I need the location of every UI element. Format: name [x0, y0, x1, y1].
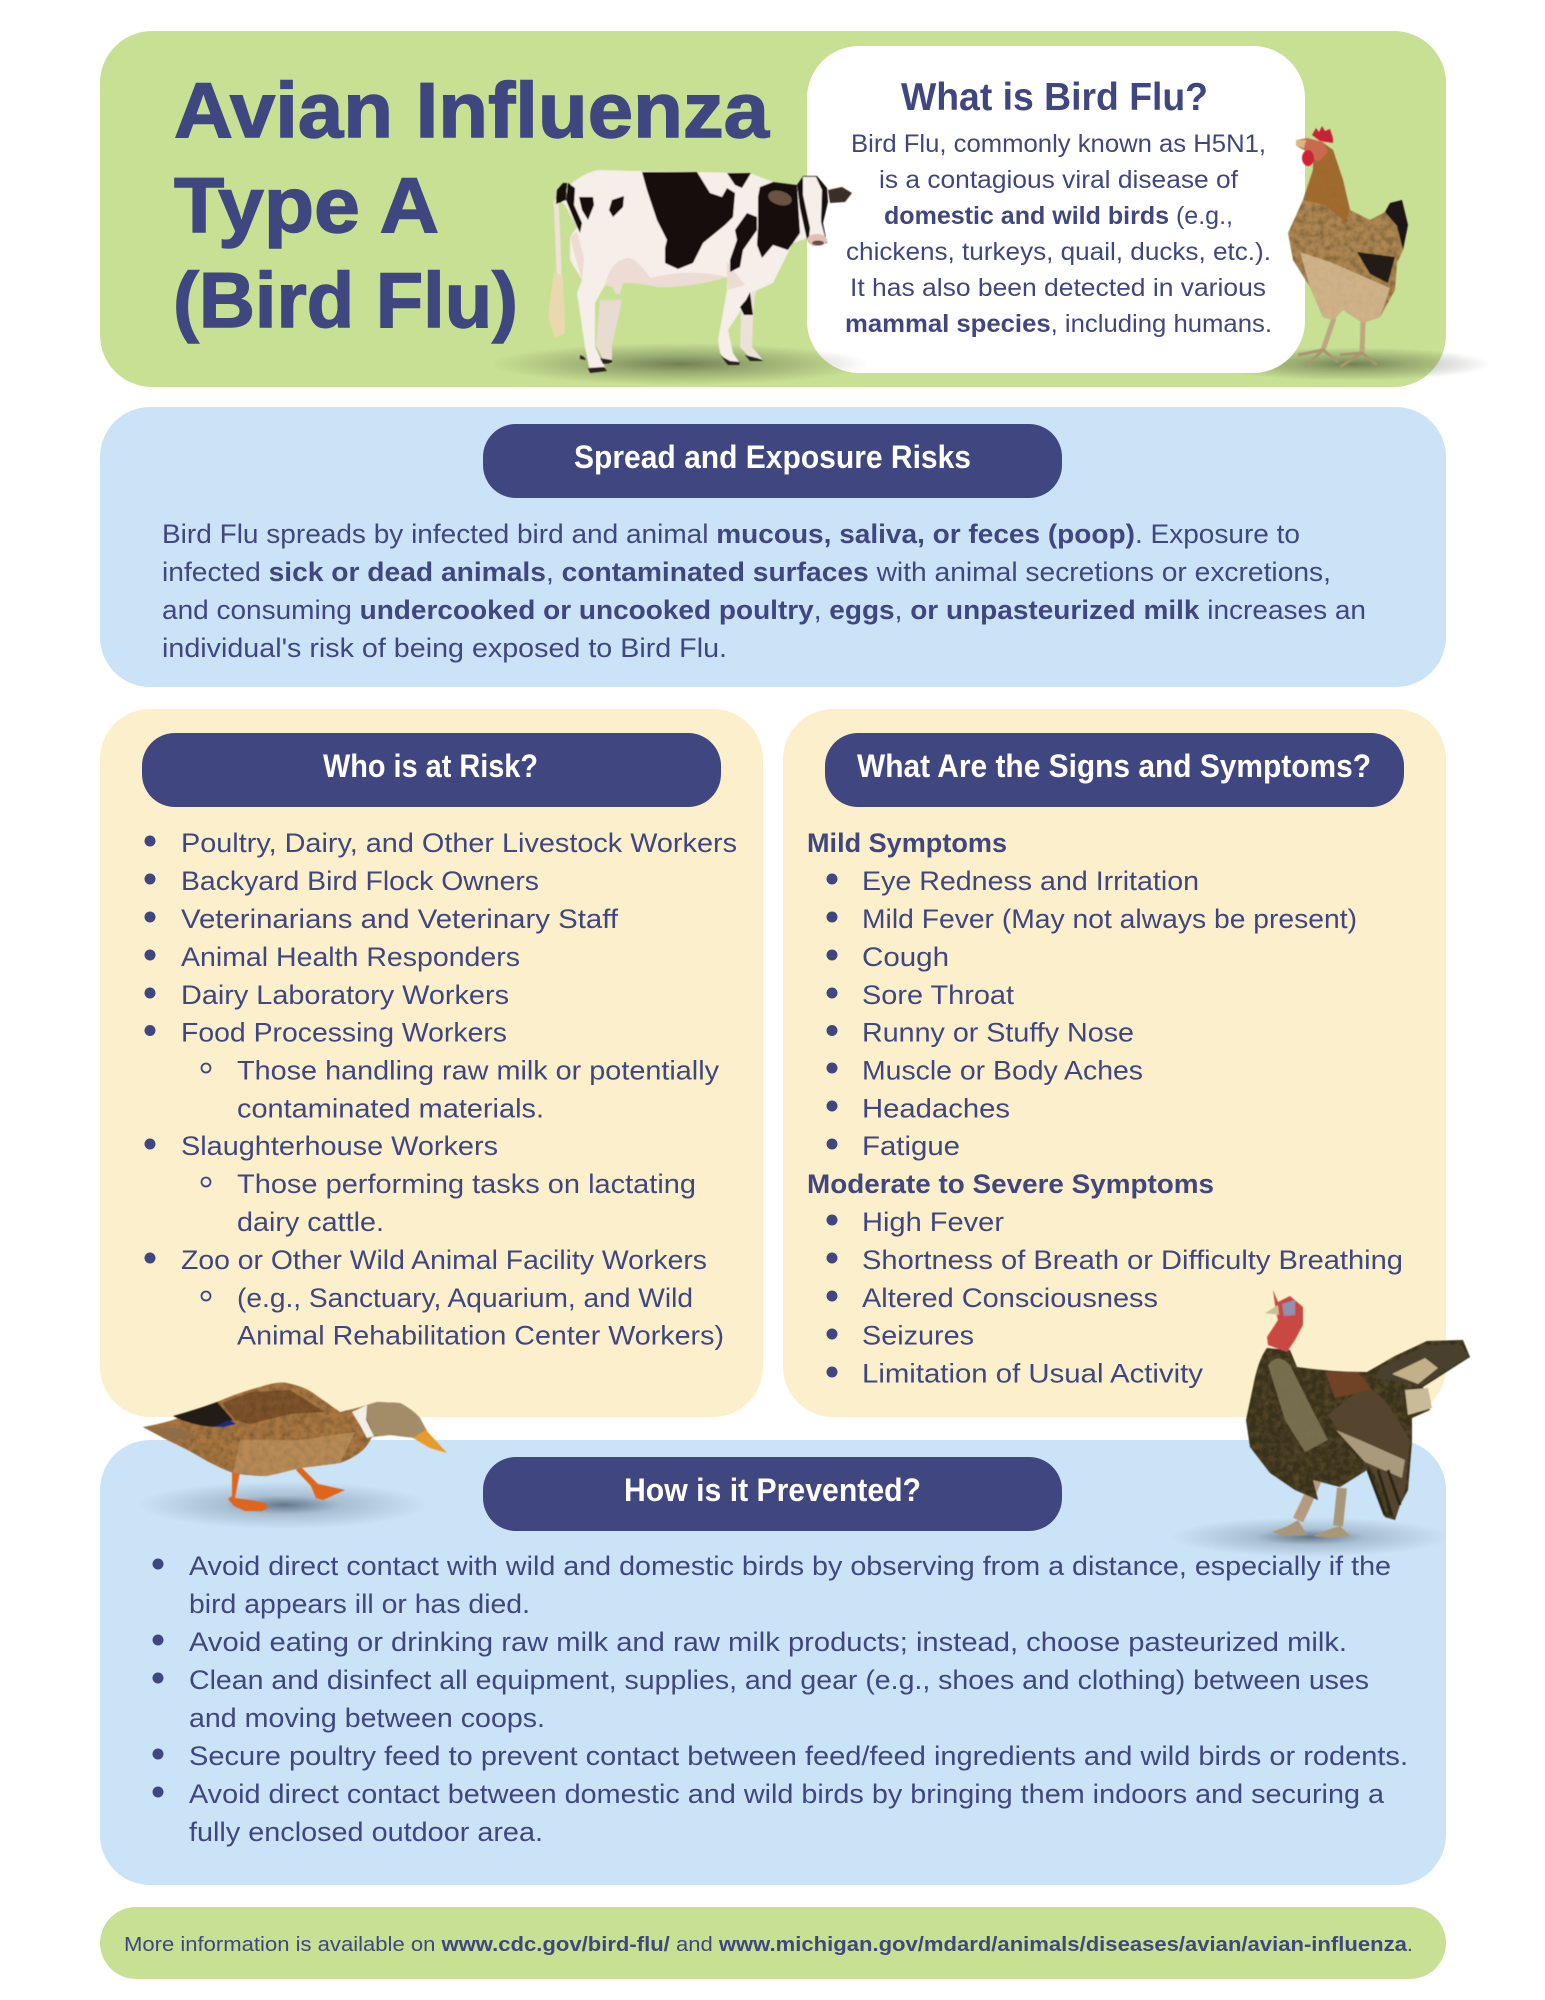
- icon: duck: [138, 1382, 447, 1529]
- title: (Bird Flu): [173, 256, 518, 344]
- panel: how is it prevented: [100, 1440, 1446, 1885]
- panel: what is bird flu: [807, 46, 1305, 373]
- list: moderate to severe symptoms: Altered Consciousness: [862, 1283, 1158, 1313]
- list: at-risk groups: dairy cattle.: [237, 1207, 384, 1237]
- heading pill: who is at risk: Who is at Risk?: [323, 748, 538, 784]
- title: [173, 66, 770, 344]
- text block: definition: [845, 130, 1272, 338]
- text block: spread description: individual's risk of being exposed to Bird Flu.: [162, 633, 727, 663]
- heading pill: how is it prevented: How is it Prevented?: [624, 1472, 921, 1508]
- list: moderate to severe symptoms: [807, 1169, 1403, 1389]
- list: prevention steps: Avoid direct contact with wild and domestic birds by observing from a distance, especially if the: [189, 1551, 1391, 1581]
- list: prevention steps: and moving between coops.: [189, 1703, 545, 1733]
- heading pill: how is it prevented: [483, 1457, 1062, 1531]
- list: prevention steps: fully enclosed outdoor area.: [189, 1817, 543, 1847]
- text block: spread description: and consuming undercooked or uncooked poultry , eggs, or unpasteurized milk increases an: [162, 595, 1366, 625]
- list: moderate to severe symptoms: Limitation of Usual Activity: [862, 1359, 1204, 1389]
- list: prevention steps: [152, 1551, 1408, 1847]
- list: mild symptoms: Cough: [862, 942, 949, 972]
- list: at-risk groups: (e.g., Sanctuary, Aquarium, and Wild: [237, 1283, 693, 1313]
- heading pill: who is at risk: [142, 733, 721, 807]
- list: moderate to severe symptoms: High Fever: [862, 1207, 1004, 1237]
- text block: spread description: infected sick or dead animals , contaminated surfaces with animal secretions or excretions,: [162, 557, 1331, 587]
- list: at-risk groups: Backyard Bird Flock Owners: [181, 866, 539, 896]
- list: at-risk groups: Those performing tasks on lactating: [237, 1169, 696, 1199]
- list: mild symptoms: Fatigue: [862, 1131, 960, 1161]
- panel: footer: [100, 1907, 1446, 1979]
- heading pill: spread and exposure risks: [483, 424, 1062, 498]
- text block: spread description: [162, 519, 1366, 663]
- list: at-risk groups: Food Processing Workers: [181, 1018, 507, 1048]
- icon: chicken: [1288, 126, 1408, 367]
- list: at-risk groups: Zoo or Other Wild Animal Facility Workers: [181, 1245, 707, 1275]
- list: at-risk groups: Poultry, Dairy, and Other Livestock Workers: [181, 828, 737, 858]
- text block: definition: It has also been detected in various: [850, 274, 1266, 302]
- list: at-risk groups: Veterinarians and Veterinary Staff: [181, 904, 619, 934]
- shadow: chicken: [1212, 347, 1492, 381]
- list: at-risk groups: Those handling raw milk or potentially: [237, 1055, 720, 1085]
- list: at-risk groups: Slaughterhouse Workers: [181, 1131, 498, 1161]
- list: mild symptoms: Mild Fever (May not always be present): [862, 904, 1357, 934]
- panel: spread and exposure risks: [100, 407, 1446, 687]
- list: moderate to severe symptoms: Shortness of Breath or Difficulty Breathing: [862, 1245, 1403, 1275]
- list: mild symptoms: [807, 828, 1357, 1161]
- list: mild symptoms: Mild Symptoms: [807, 828, 1007, 858]
- list: mild symptoms: Runny or Stuffy Nose: [862, 1018, 1134, 1048]
- heading: what is bird flu: What is Bird Flu?: [901, 76, 1208, 119]
- list: prevention steps: bird appears ill or has died.: [189, 1589, 530, 1619]
- icon: turkey: [1170, 1290, 1470, 1557]
- list: moderate to severe symptoms: Moderate to Severe Symptoms: [807, 1169, 1214, 1199]
- text block: definition: chickens, turkeys, quail, ducks, etc.).: [846, 238, 1271, 266]
- list: moderate to severe symptoms: Seizures: [862, 1321, 974, 1351]
- text block: definition: mammal species, including humans.: [845, 310, 1272, 338]
- title: Avian Influenza: [174, 66, 770, 154]
- list: mild symptoms: Headaches: [862, 1093, 1010, 1123]
- list: at-risk groups: contaminated materials.: [237, 1093, 544, 1123]
- title: Type A: [174, 161, 439, 249]
- heading pill: signs and symptoms: What Are the Signs and Symptoms?: [857, 748, 1371, 784]
- list: prevention steps: Avoid eating or drinking raw milk and raw milk products; instead, choose pasteurized milk.: [189, 1627, 1347, 1657]
- list: at-risk groups: Dairy Laboratory Workers: [181, 980, 509, 1010]
- list: mild symptoms: Eye Redness and Irritation: [862, 866, 1199, 896]
- list: mild symptoms: Sore Throat: [862, 980, 1015, 1010]
- list: mild symptoms: Muscle or Body Aches: [862, 1055, 1143, 1085]
- list: prevention steps: Avoid direct contact between domestic and wild birds by bringing them indoors and securing a: [189, 1779, 1384, 1809]
- panel: signs and symptoms: [783, 709, 1446, 1417]
- heading pill: spread and exposure risks: Spread and Exposure Risks: [574, 439, 971, 475]
- list: at-risk groups: Animal Health Responders: [181, 942, 520, 972]
- heading pill: signs and symptoms: [825, 733, 1404, 807]
- panel: header: [100, 31, 1492, 387]
- text block: spread description: Bird Flu spreads by infected bird and animal mucous, saliva, or feces (poop) . Exposure to: [162, 519, 1300, 549]
- icon: cow: [490, 170, 870, 385]
- panel: who is at risk: [100, 709, 763, 1417]
- text block: definition: is a contagious viral disease of: [879, 166, 1238, 194]
- list: prevention steps: Clean and disinfect all equipment, supplies, and gear (e.g., shoes and clothing) between uses: [189, 1665, 1369, 1695]
- text block: definition: domestic and wild birds (e.g.,: [884, 202, 1233, 230]
- text block: definition: Bird Flu, commonly known as H5N1,: [851, 130, 1266, 158]
- list: at-risk groups: Animal Rehabilitation Center Workers): [237, 1321, 724, 1351]
- list: at-risk groups: [144, 828, 737, 1351]
- text: more information links: More information is available on www.cdc.gov/bird-flu/ and www.michigan.gov/mdard/animals/diseases/avian/avian-influenza .: [124, 1934, 1413, 1956]
- list: prevention steps: Secure poultry feed to prevent contact between feed/feed ingredients and wild birds or rodents.: [189, 1741, 1408, 1771]
